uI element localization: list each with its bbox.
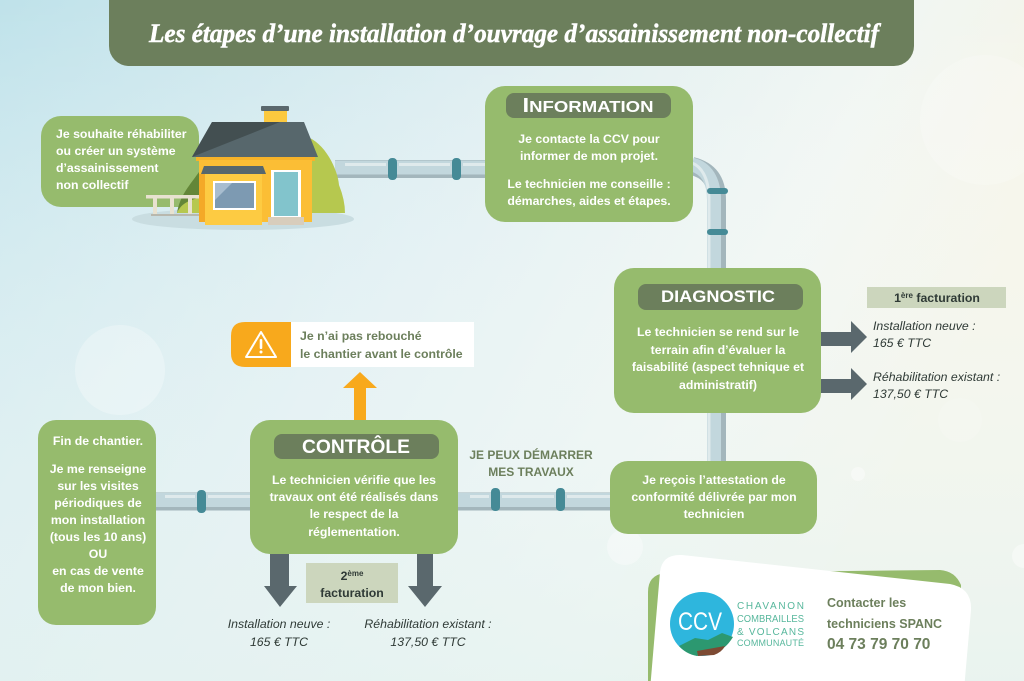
panel: fin de chantier: sur les visites xyxy=(57,479,139,493)
panel: attestation xyxy=(610,461,817,534)
contact text: Contacter les xyxy=(827,596,906,610)
panel: diagnostic: administratif) xyxy=(679,378,757,392)
pricing: installation neuve: Installation neuve : xyxy=(873,319,976,333)
panel: fin de chantier: (tous les 10 ans) xyxy=(50,530,146,544)
panel: fin de chantier: mon installation xyxy=(51,513,145,527)
contact text: techniciens SPANC xyxy=(827,617,942,631)
logo: CCV xyxy=(670,592,804,656)
label: 1ère facturation: ère xyxy=(901,291,913,300)
pipe collars xyxy=(197,158,728,513)
label: 2ème facturation: ème xyxy=(347,569,364,578)
panel: start xyxy=(41,116,199,207)
label: 1ère facturation: facturation xyxy=(913,291,980,305)
heading: information xyxy=(506,93,671,118)
pricing: installation neuve: 165 € TTC xyxy=(250,635,308,649)
panel: diagnostic: faisabilité (aspect tehnique et xyxy=(632,360,804,374)
icon: warning xyxy=(246,332,276,357)
logo: CCV: COMBRAILLES xyxy=(737,614,804,625)
panel: information: informer de mon projet. xyxy=(520,149,658,163)
icon: house xyxy=(132,106,354,230)
panel: fin de chantier: Je me renseigne xyxy=(50,462,146,476)
panel: fin de chantier: périodiques de xyxy=(54,496,142,510)
panel: contrôle: travaux ont été réalisés dans xyxy=(270,490,439,504)
panel: fin de chantier xyxy=(38,420,156,625)
pricing: installation neuve: 165 € TTC xyxy=(873,336,931,350)
panel: start: Je souhaite réhabiliter xyxy=(56,127,187,141)
arrow: orange up xyxy=(343,372,377,420)
panel: information xyxy=(485,86,693,222)
panel: fin de chantier: Fin de chantier. xyxy=(53,434,143,448)
panel: contrôle: réglementation. xyxy=(308,525,400,539)
panel: attestation: Je reçois l’attestation de xyxy=(642,473,786,487)
panel: start: d’assainissement xyxy=(56,161,159,175)
label: travaux: JE PEUX DÉMARRER xyxy=(469,447,593,462)
panel: information: Je contacte la CCV pour xyxy=(518,132,660,146)
panel: attestation: conformité délivrée par mon xyxy=(631,490,797,504)
pricing: réhabilitation existant: 137,50 € TTC xyxy=(873,387,948,401)
title banner xyxy=(109,0,914,66)
panel: contrôle: Le technicien vérifie que les xyxy=(272,473,436,487)
contact text: 04 73 79 70 70 xyxy=(827,636,930,653)
panel: information: démarches, aides et étapes. xyxy=(507,194,671,208)
callout: warning: le chantier avant le contrôle xyxy=(300,347,463,361)
label: travaux: MES TRAVAUX xyxy=(488,465,574,479)
pipes xyxy=(150,163,717,502)
arrow: down right xyxy=(408,554,442,607)
logo: CCV: CHAVANON xyxy=(737,601,804,612)
panel: diagnostic: Le technicien se rend sur le xyxy=(637,325,799,339)
heading: information: INFORMATION xyxy=(522,95,654,117)
panel: fin de chantier: de mon bien. xyxy=(60,581,136,595)
pricing: réhabilitation existant: Réhabilitation existant : xyxy=(364,617,492,631)
heading: diagnostic xyxy=(638,284,803,310)
panel: diagnostic: terrain afin d’évaluer la xyxy=(651,343,785,357)
arrow: diagnostic to réhabilitation xyxy=(821,368,867,400)
panel: fin de chantier: en cas de vente xyxy=(52,564,144,578)
panel: contrôle xyxy=(250,420,458,554)
logo: CCV: COMMUNAUTÉ xyxy=(737,638,804,648)
panel: contrôle: le respect de la xyxy=(310,507,399,521)
heading: contrôle xyxy=(274,434,439,459)
label: 2ème facturation xyxy=(306,563,398,603)
panel: start: non collectif xyxy=(56,178,129,192)
logo: CCV: & VOLCANS xyxy=(737,627,804,638)
heading: diagnostic: DIAGNOSTIC xyxy=(661,287,775,306)
panel: diagnostic xyxy=(614,268,821,413)
callout: warning xyxy=(231,322,474,367)
panel: fin de chantier: OU xyxy=(89,547,107,561)
arrow: diagnostic to installation neuve xyxy=(821,321,867,353)
pricing: réhabilitation existant: Réhabilitation existant : xyxy=(873,370,1000,384)
heading: contrôle: CONTRÔLE xyxy=(302,434,410,458)
panel: start: ou créer un système xyxy=(56,144,176,158)
title: Les étapes d’une installation d’ouvrage d’assainissement non-collectif xyxy=(148,19,881,48)
label: 2ème facturation: 2 xyxy=(341,569,364,583)
callout: warning: Je n’ai pas rebouché xyxy=(300,329,422,343)
arrow: down left xyxy=(264,554,297,607)
logo: CCV: CCV xyxy=(678,608,722,636)
pricing: installation neuve: Installation neuve : xyxy=(228,617,330,631)
pricing: réhabilitation existant: 137,50 € TTC xyxy=(390,635,466,649)
panel: information: Le technicien me conseille : xyxy=(507,177,671,191)
label: 1ère facturation xyxy=(867,287,1006,308)
panel: attestation: technicien xyxy=(684,507,744,521)
panel: contact xyxy=(648,555,971,681)
label: 1ère facturation: 1 xyxy=(894,291,901,305)
label: 2ème facturation: facturation xyxy=(320,586,384,600)
